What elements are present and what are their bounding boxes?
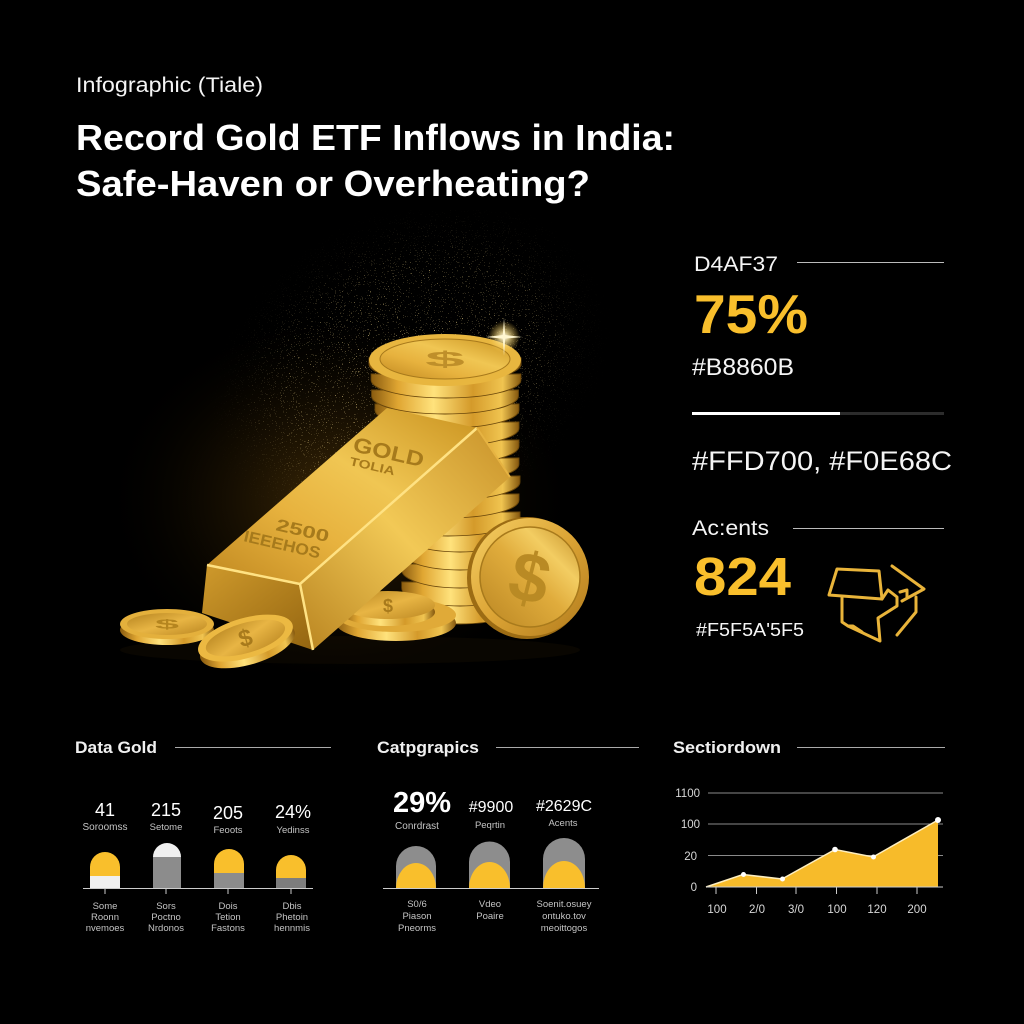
column notes: ontuko.tov [542, 911, 586, 922]
column labels [82, 822, 310, 836]
column notes: Dois [218, 901, 238, 912]
column notes: Pneorms [398, 923, 436, 934]
main title [76, 117, 675, 204]
coins under bar: $ [383, 596, 393, 616]
bar chart: four capsules [83, 843, 313, 894]
column labels [395, 818, 578, 832]
main title: Safe-Haven or Overheating? [76, 163, 590, 204]
colour text: #FFD700, #F0E68C [692, 446, 952, 476]
small title: Infographic (Tiale) [76, 74, 263, 97]
column notes: Nrdonos [148, 923, 184, 934]
large standing coin: $ [501, 535, 558, 621]
bar engraving: GOLD [351, 433, 426, 472]
column notes [398, 899, 592, 934]
column notes: Soenit.osuey [537, 899, 592, 910]
column values: 205 [213, 803, 243, 823]
column labels: Acents [548, 818, 578, 829]
data points [741, 817, 941, 882]
column notes: Phetoin [276, 912, 308, 923]
panel: categories [377, 738, 639, 934]
gold bar: 2500 [274, 515, 331, 546]
column notes: Poctno [151, 912, 181, 923]
column labels: Setome [150, 822, 182, 833]
y axis labels: 100 [681, 819, 700, 831]
column notes: Roonn [91, 912, 119, 923]
progress bar [692, 412, 944, 415]
panel: stat 75% [692, 253, 944, 415]
left flat coin [120, 609, 214, 645]
x axis labels: 200 [907, 904, 927, 916]
coin stack: $ [425, 348, 465, 371]
front coin: $ [235, 624, 256, 653]
column notes: hennmis [274, 923, 310, 934]
y axis labels: 1100 [675, 788, 700, 800]
illustration: gold bar and coins [120, 210, 600, 668]
panel: accents [692, 517, 944, 641]
column values [95, 800, 311, 823]
column notes: nvemoes [86, 923, 125, 934]
line series [706, 820, 938, 887]
column notes: meoittogos [541, 923, 587, 934]
column labels: Soroomss [82, 822, 128, 833]
column values [393, 787, 592, 819]
icon: open box with arrow [829, 566, 924, 641]
grid lines [708, 793, 943, 856]
column notes: Sors [156, 901, 176, 912]
front coin [193, 605, 300, 678]
x axis labels: 3/0 [788, 904, 804, 916]
stat value: 75% [694, 283, 808, 345]
column values: 41 [95, 800, 115, 820]
x axis labels: 2/0 [749, 904, 765, 916]
column notes: Vdeo [479, 899, 501, 910]
column values: 29% [393, 787, 451, 819]
column labels: Yedinss [277, 825, 310, 836]
y axis labels [675, 788, 700, 894]
large standing coin [467, 517, 589, 639]
column labels: Conrdrast [395, 821, 439, 832]
gold bar: TOLIA [348, 454, 397, 478]
column values: 24% [275, 802, 311, 822]
glitter particles [221, 210, 600, 505]
stat caption: #B8860B [692, 354, 794, 381]
y axis labels: 20 [684, 851, 697, 863]
coin stack [369, 334, 521, 624]
column values: #2629C [536, 798, 592, 815]
column values: #9900 [469, 799, 513, 816]
accents heading: Ac:ents [692, 517, 769, 540]
accents value: 824 [694, 547, 791, 607]
x axis labels [707, 904, 927, 916]
panel: data gold [75, 738, 331, 934]
x axis labels: 120 [867, 904, 887, 916]
gold bar: IEEEHOS [242, 528, 322, 563]
x axis labels: 100 [827, 904, 847, 916]
column notes: Dbis [282, 901, 302, 912]
accents caption: #F5F5A'5F5 [696, 620, 804, 640]
stat label: D4AF37 [694, 253, 778, 276]
column notes: Fastons [211, 923, 245, 934]
x axis [706, 887, 943, 894]
column notes: Tetion [215, 912, 241, 923]
column notes: Piason [402, 911, 432, 922]
left flat coin: $ [155, 616, 179, 631]
main title: Record Gold ETF Inflows in India: [76, 117, 675, 158]
x axis labels: 100 [707, 904, 727, 916]
heading: Sectiordown [673, 738, 781, 757]
coins under bar [336, 591, 456, 641]
heading: Data Gold [75, 738, 157, 757]
gold bar [202, 408, 510, 650]
column notes: Poaire [476, 911, 504, 922]
column values: 215 [151, 800, 181, 820]
semi-circle chart [383, 838, 599, 888]
column notes: Some [93, 901, 117, 912]
area series [706, 820, 938, 887]
panel: sectiondown line chart [673, 738, 945, 916]
column notes [86, 901, 310, 934]
column labels: Peqrtin [475, 820, 505, 831]
column labels: Feoots [213, 825, 243, 836]
column notes: S0/6 [407, 899, 427, 910]
y axis labels: 0 [691, 882, 697, 894]
heading: Catpgrapics [377, 738, 479, 757]
sparkle [486, 318, 522, 356]
